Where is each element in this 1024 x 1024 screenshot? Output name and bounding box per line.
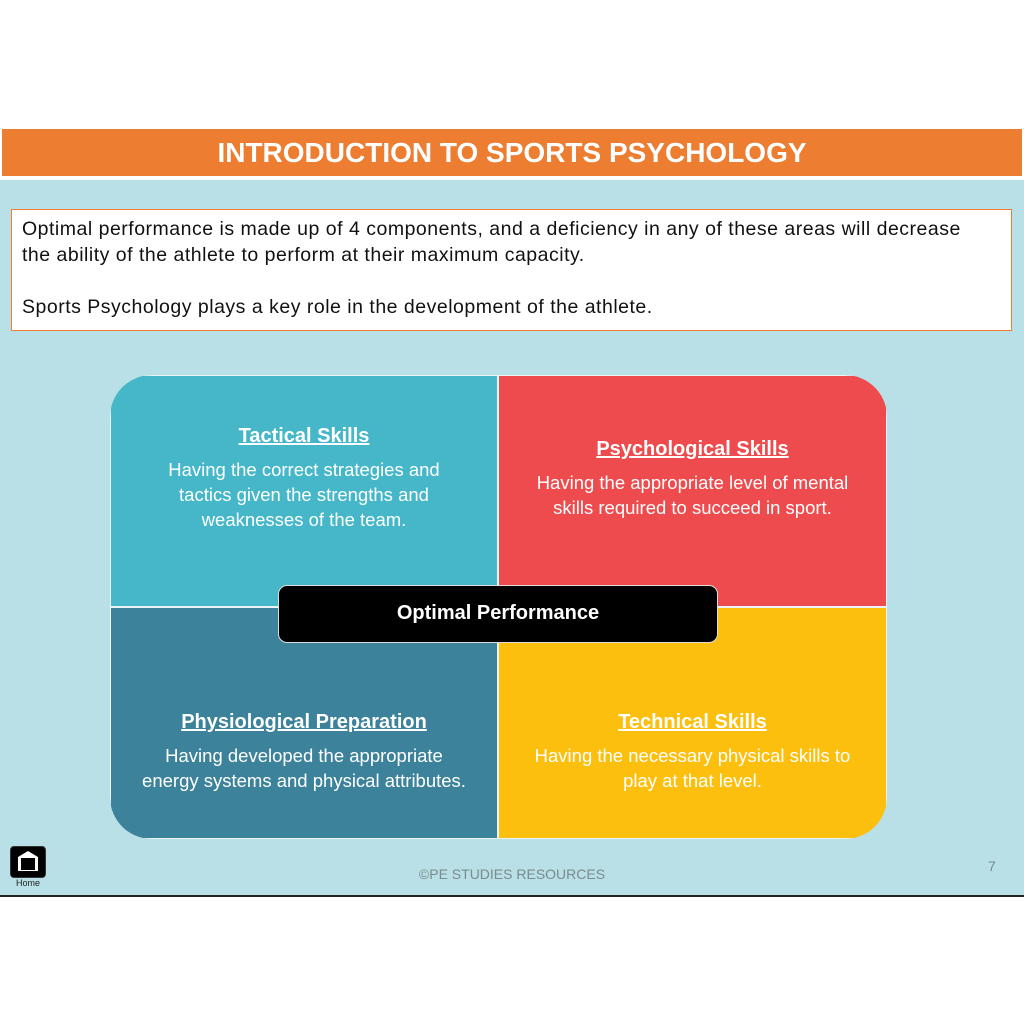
center label: optimal performance: Optimal Performance [397, 602, 599, 624]
page number: 7 [988, 858, 996, 874]
quadrant diagram [110, 375, 887, 839]
panel: technical skills: Having the necessary physical skills to [535, 745, 850, 766]
intro text box: the ability of the athlete to perform at their maximum capacity. [22, 244, 585, 266]
footer copyright: ©PE STUDIES RESOURCES [419, 866, 605, 882]
panel: psychological skills: Psychological Skills [596, 438, 789, 460]
panel: tactical skills: Having the correct strategies and [168, 459, 440, 480]
panel: psychological skills [498, 375, 887, 607]
icon: home: Home [16, 878, 40, 888]
center label: optimal performance [278, 585, 718, 643]
panel: tactical skills: tactics given the strengths and [179, 484, 429, 505]
slide background [0, 180, 1024, 897]
intro text box: Optimal performance is made up of 4 components, and a deficiency in any of these areas will decrease [22, 218, 961, 240]
panel: psychological skills: Having the appropriate level of mental [537, 472, 848, 493]
panel: technical skills [498, 607, 887, 839]
icon: home [10, 846, 46, 888]
panel: tactical skills: weaknesses of the team. [202, 509, 406, 530]
intro text box: Sports Psychology plays a key role in the development of the athlete. [22, 296, 653, 318]
intro text box [11, 209, 1012, 331]
panel: tactical skills: Tactical Skills [239, 425, 369, 447]
panel: physiological preparation: energy systems and physical attributes. [142, 770, 466, 791]
panel: physiological preparation [110, 607, 498, 839]
title bar [2, 129, 1022, 176]
title bar: INTRODUCTION TO SPORTS PSYCHOLOGY [217, 137, 807, 168]
panel: tactical skills [110, 375, 498, 607]
panel: technical skills: play at that level. [623, 770, 762, 791]
panel: psychological skills: skills required to succeed in sport. [553, 497, 832, 518]
panel: technical skills: Technical Skills [618, 711, 767, 733]
panel: physiological preparation: Having developed the appropriate [165, 745, 443, 766]
panel: physiological preparation: Physiological Preparation [181, 711, 427, 733]
